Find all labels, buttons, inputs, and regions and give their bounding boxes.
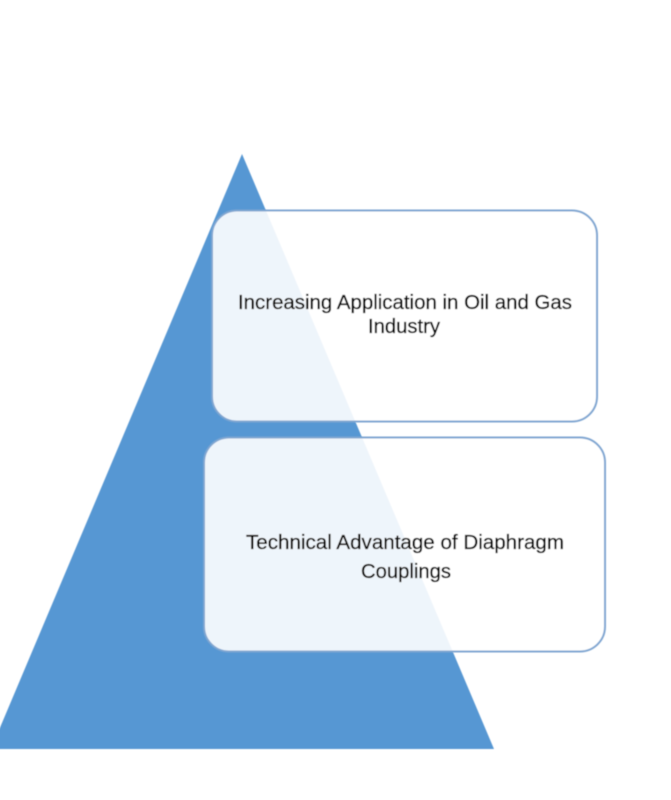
panel: oil and gas driver <box>212 210 597 422</box>
text: oil and gas driver: Industry <box>368 316 440 338</box>
pyramid triangle <box>0 154 494 749</box>
text: technical advantage driver: Couplings <box>361 561 451 583</box>
text: oil and gas driver: Increasing Application in Oil and Gas <box>238 292 572 314</box>
text: technical advantage driver <box>246 532 564 583</box>
text: technical advantage driver: Technical Advantage of Diaphragm <box>246 532 564 554</box>
text: oil and gas driver <box>238 292 572 338</box>
panel: technical advantage driver <box>204 438 605 652</box>
